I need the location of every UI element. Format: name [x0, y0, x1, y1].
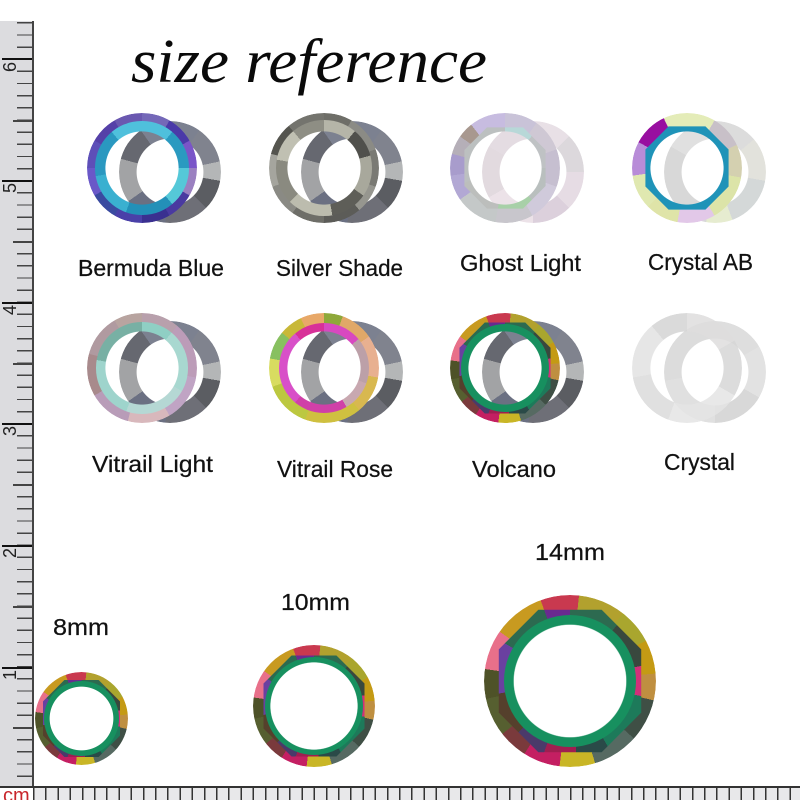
front ring — [632, 113, 742, 223]
front ring — [269, 113, 379, 223]
front ring — [269, 313, 379, 423]
panel: Vitrail Light — [87, 313, 221, 478]
back ring — [482, 321, 584, 423]
back ring — [119, 121, 221, 223]
text: 8mm — [53, 614, 109, 640]
ruler: horizontal scale — [0, 786, 800, 800]
back ring — [482, 121, 584, 223]
front ring — [450, 313, 560, 423]
panel: Volcano — [450, 313, 584, 482]
ring — [253, 645, 375, 767]
text: Ghost Light — [460, 250, 581, 276]
ruler numbers: 2 — [0, 548, 20, 558]
size sample: 8mm — [35, 614, 128, 765]
front ring — [632, 313, 742, 423]
back ring — [664, 121, 766, 223]
back ring — [119, 321, 221, 423]
size sample: 14mm — [484, 539, 656, 767]
ruler numbers — [0, 62, 20, 680]
text: Vitrail Light — [92, 451, 213, 477]
panel: Vitrail Rose — [269, 313, 403, 482]
front ring — [87, 113, 197, 223]
text: Vitrail Rose — [277, 456, 393, 482]
back ring — [664, 321, 766, 423]
text: Crystal — [664, 449, 735, 475]
text: Volcano — [472, 456, 556, 482]
panel: Crystal AB — [632, 113, 766, 276]
panel: Ghost Light — [450, 113, 584, 276]
panel: Crystal — [632, 313, 766, 476]
ruler numbers: 1 — [0, 670, 20, 680]
text: 14mm — [535, 539, 605, 565]
ruler numbers: 5 — [0, 183, 20, 193]
front ring — [87, 313, 197, 423]
text: Silver Shade — [276, 255, 403, 281]
ruler: vertical scale — [0, 21, 34, 787]
front ring — [450, 113, 560, 223]
ring — [484, 595, 656, 767]
back ring — [301, 321, 403, 423]
text: 10mm — [281, 589, 350, 615]
text: Bermuda Blue — [78, 255, 224, 281]
ruler numbers: 6 — [0, 62, 20, 72]
title: size reference — [131, 28, 487, 96]
ring — [35, 672, 128, 765]
text: Crystal AB — [648, 249, 753, 275]
ruler numbers: 4 — [0, 305, 20, 315]
size sample: 10mm — [253, 589, 375, 767]
ruler numbers: 3 — [0, 426, 20, 436]
back ring — [301, 121, 403, 223]
panel: Bermuda Blue — [78, 113, 224, 281]
panel: Silver Shade — [269, 113, 403, 281]
